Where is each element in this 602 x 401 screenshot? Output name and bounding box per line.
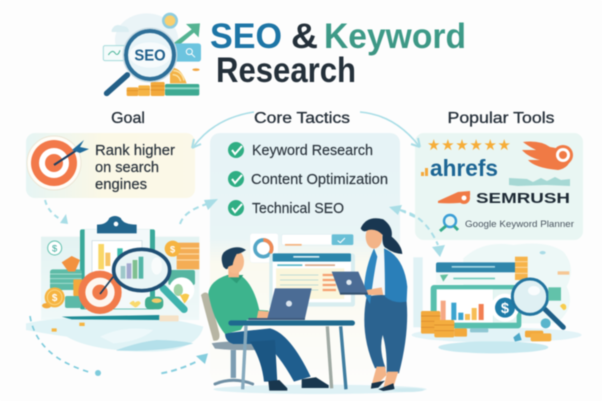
- heading: Popular Tools: Popular Tools: [448, 110, 554, 127]
- arrow: core to tools: [360, 112, 420, 147]
- logo: Google Keyword Planner: [440, 215, 574, 231]
- heart and leaves: [129, 277, 194, 309]
- goal text: Rank higher: [95, 142, 175, 159]
- man: [208, 247, 329, 391]
- illustration: analytics and target: [26, 216, 208, 376]
- man: chair: [201, 293, 262, 384]
- title: SEO: [210, 17, 282, 56]
- tactic: Keyword Research: Keyword Research: [252, 143, 373, 159]
- dashed arrow to center: [161, 353, 208, 373]
- heading: Core Tactics: Core Tactics: [254, 110, 350, 127]
- arrow: illustration to core: [180, 199, 218, 224]
- panel: popular tools: [415, 133, 583, 240]
- arrow: tools to core: [389, 205, 415, 217]
- dollar badge: [491, 294, 519, 322]
- arrow: core to tools illustration: [400, 210, 445, 257]
- logo: SEMrush: [438, 190, 570, 207]
- title: &: [291, 17, 318, 56]
- coins and stacks: $: [52, 293, 58, 304]
- logo: Google Keyword Planner: Google Keyword Planner: [465, 219, 574, 230]
- title: Research: [216, 51, 356, 90]
- illustration: team at work: [201, 218, 427, 394]
- arrow: core to goal: [192, 112, 254, 148]
- search bar: [282, 234, 353, 246]
- monitor: [431, 285, 521, 332]
- target: [78, 271, 122, 314]
- pen: [62, 315, 179, 321]
- woman: [332, 218, 407, 391]
- header icon: SEO magnifier: [103, 13, 201, 96]
- panel: core tactics: [210, 133, 400, 383]
- donut card: [250, 233, 278, 263]
- logo: ahrefs: ahrefs: [430, 155, 498, 181]
- icon: target with dart: [27, 136, 89, 190]
- small accents: [513, 251, 569, 342]
- decorative mini scene: [509, 177, 570, 186]
- shadow at bottom of woman: [392, 388, 424, 392]
- ground water: [412, 328, 582, 353]
- coins and stacks: $: [170, 244, 176, 254]
- rating stars: ★★★★★★: [427, 137, 511, 154]
- coins and stacks: [42, 241, 199, 308]
- icon: orange comet: [522, 142, 573, 170]
- magnifier: [114, 249, 184, 309]
- browser window: [436, 257, 528, 284]
- arrow: goal to illustration: [45, 200, 68, 224]
- cloud backdrop: [463, 243, 571, 323]
- illustration: monitor and revenue: [412, 243, 582, 353]
- panel: goal: [26, 133, 195, 198]
- coin stacks: [421, 311, 551, 341]
- tactic: Technical SEO: Technical SEO: [252, 201, 344, 217]
- title: Keyword: [324, 17, 466, 56]
- header icon: SEO magnifier: SEO: [134, 48, 166, 65]
- clipboard: [80, 216, 155, 309]
- dollar badge: $: [501, 301, 509, 317]
- title: [210, 17, 466, 90]
- logo: SEMrush: SEMRUSH: [476, 190, 570, 207]
- dashboard window: [269, 253, 355, 307]
- goal text: on search: [95, 159, 159, 176]
- coins and stacks: $: [52, 244, 58, 254]
- goal text: [95, 142, 175, 193]
- heading: Goal: Goal: [111, 110, 145, 127]
- magnifier: [512, 279, 563, 327]
- goal text: engines: [95, 176, 147, 193]
- dashed loop arrow: [30, 316, 101, 376]
- floor shadow: [213, 385, 427, 394]
- tactic: Content Optimization: Content Optimization: [251, 172, 388, 188]
- table and laptop: [228, 288, 355, 389]
